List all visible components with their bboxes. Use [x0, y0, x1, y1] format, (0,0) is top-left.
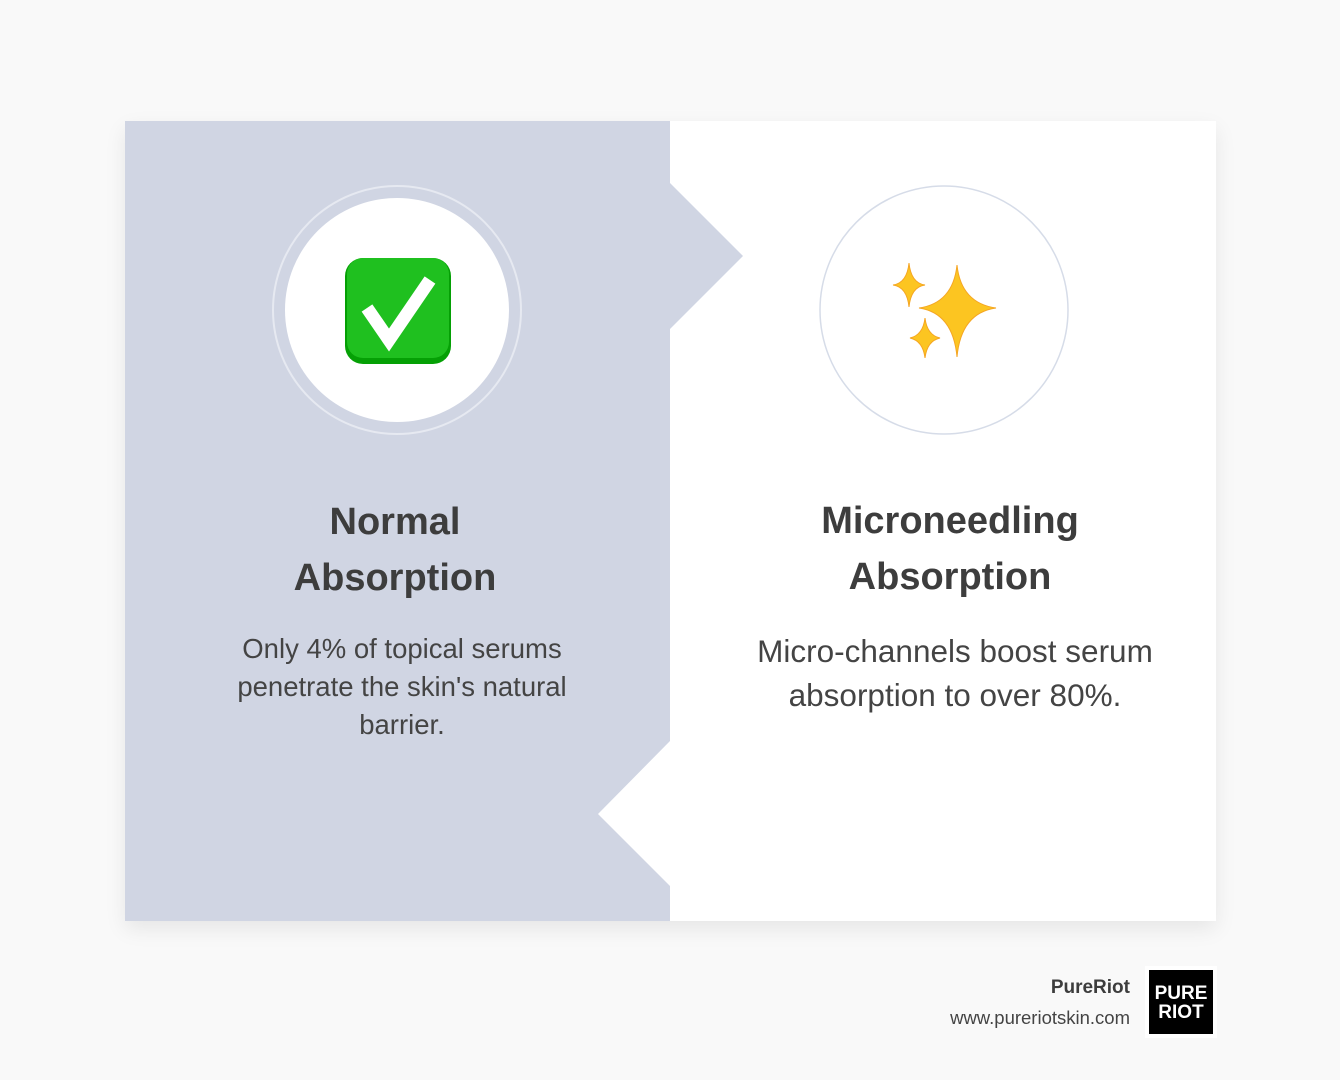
panel: left normal absorption [125, 121, 670, 921]
text: microneedling description: Micro-channels boost serum absorption to over 80%. [757, 633, 1153, 713]
heading: microneedling absorption: Absorption [849, 556, 1051, 598]
heading: normal absorption: Normal [330, 501, 460, 543]
text: normal description: Only 4% of topical serums penetrate the skin's natural barrier. [237, 633, 567, 740]
logo: RIOT [1158, 1002, 1204, 1023]
heading: normal absorption: Absorption [294, 557, 496, 599]
footer brand text: www.pureriotskin.com [950, 1007, 1130, 1028]
logo [1145, 966, 1217, 1038]
footer brand text [950, 977, 1130, 1028]
footer brand text: PureRiot [1051, 977, 1130, 998]
heading: microneedling absorption: Microneedling [821, 500, 1079, 542]
heading: microneedling absorption [821, 500, 1079, 598]
icon: checkmark circle [272, 185, 522, 435]
card [125, 121, 1216, 921]
logo: PURE [1155, 983, 1207, 1004]
heading: normal absorption [294, 501, 496, 599]
icon: sparkles circle [819, 185, 1069, 435]
